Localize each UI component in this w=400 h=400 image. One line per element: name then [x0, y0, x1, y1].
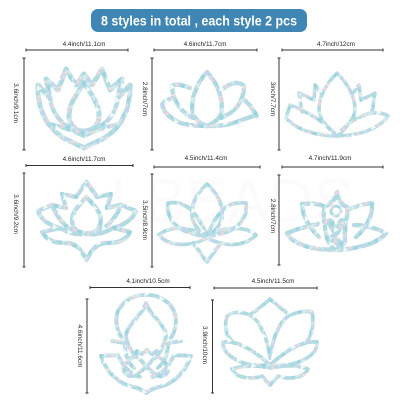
- lotus 1 with dimensions: 4.4inch/11.1cm: [63, 41, 105, 48]
- lotus 5 with dimensions: 3.5inch/8.9cm: [141, 200, 148, 240]
- lotus 4 with dimensions: 3.6inch/9.2cm: [12, 194, 19, 234]
- lotus 1 with dimensions: 3.6inch/9.1cm: [12, 83, 19, 123]
- lotus 6 with dimensions: [269, 155, 386, 265]
- title banner: 8 styles in total , each style 2 pcs: [101, 13, 297, 28]
- lotus 8 with dimensions: [201, 278, 317, 393]
- lotus 2 with dimensions: 2.8inch/7cm: [141, 82, 148, 116]
- lotus 3 with dimensions: 3inch/7.7cm: [269, 82, 276, 116]
- lotus 2 with dimensions: [141, 41, 257, 150]
- lotus 5 with dimensions: [141, 155, 260, 267]
- lotus 4 with dimensions: [12, 156, 136, 267]
- lotus 4 with dimensions: 4.6inch/11.7cm: [63, 156, 105, 163]
- lotus 8 with dimensions: 4.5inch/11.5cm: [252, 278, 294, 285]
- lotus 2 with dimensions: 4.6inch/11.7cm: [184, 41, 226, 48]
- lotus 5 with dimensions: 4.5inch/11.4cm: [185, 155, 227, 162]
- lotus 8 with dimensions: 3.9inch/10cm: [201, 326, 208, 364]
- lotus 7 with dimensions: 4.6inch/11.6cm: [76, 325, 83, 367]
- lotus 6 with dimensions: 2.8inch/7cm: [269, 199, 276, 233]
- watermark: LBEADS: [110, 167, 355, 236]
- lotus 7 with dimensions: 4.1inch/10.5cm: [126, 278, 170, 285]
- title banner: [91, 9, 307, 32]
- lotus 7 with dimensions: [76, 278, 191, 393]
- lotus 3 with dimensions: 4.7inch/12cm: [317, 41, 355, 48]
- lotus 3 with dimensions: [269, 41, 388, 150]
- lotus 6 with dimensions: 4.7inch/11.9cm: [309, 155, 351, 162]
- lotus 1 with dimensions: [12, 41, 130, 150]
